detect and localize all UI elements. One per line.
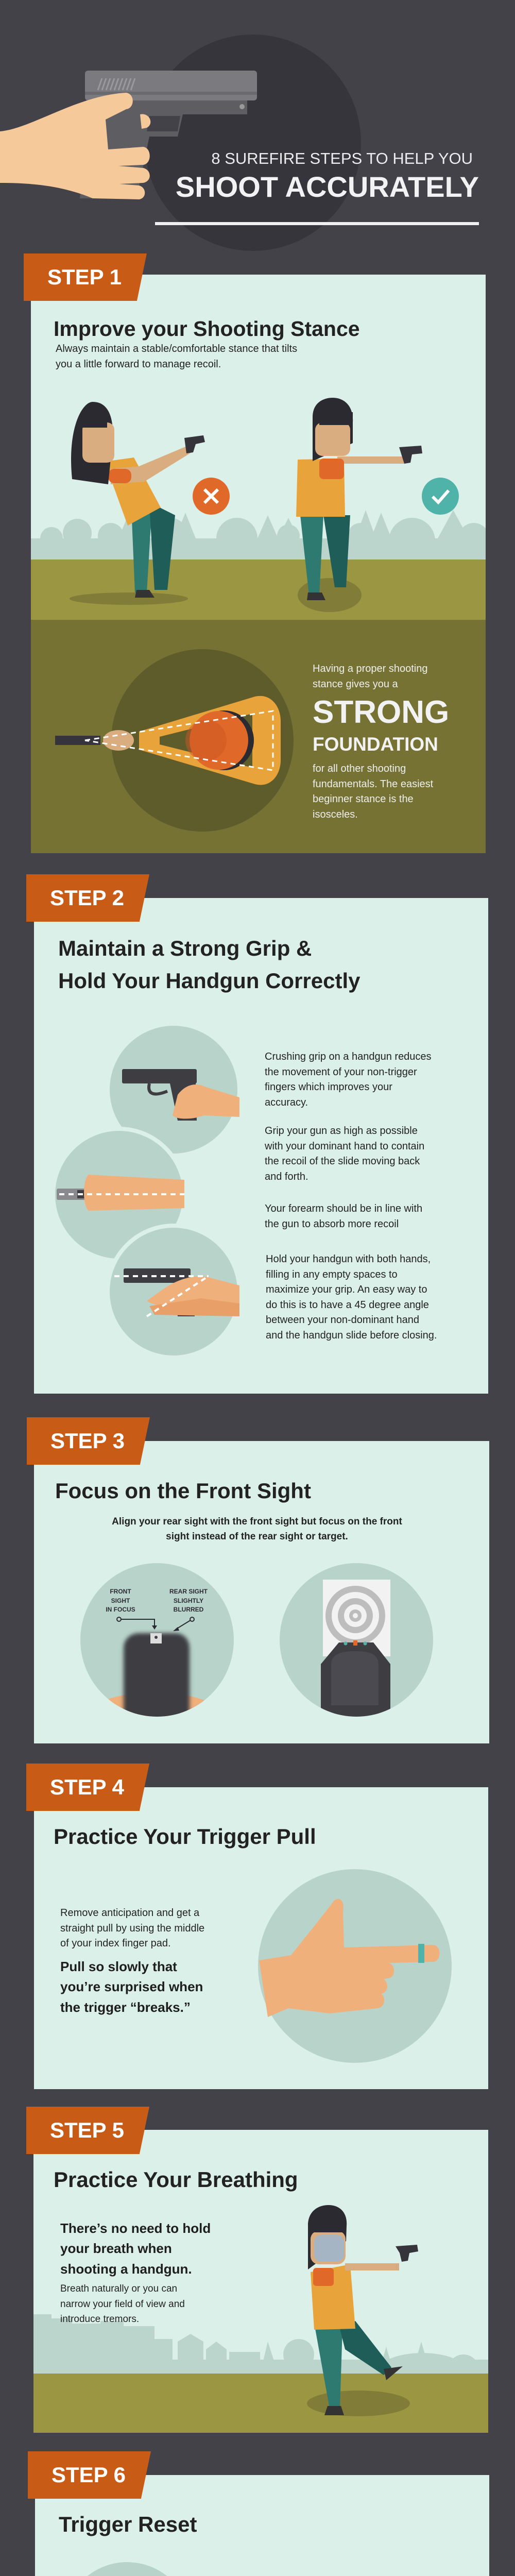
text: grip tips: do this is to have a 45 degree angle [266,1299,429,1311]
subtitle: sight instead of the rear sight or target. [166,1531,348,1542]
text: trigger pull [60,1907,204,1949]
step 5 tab: STEP 5 [50,2118,124,2142]
sight picture: front sight focus: FRONT [110,1588,131,1595]
sight picture: front sight focus: SIGHT [111,1597,130,1604]
heading: Focus on the Front Sight [55,1479,311,1503]
heading: Practice Your Trigger Pull [54,1824,316,1849]
heading: Trigger Reset [59,2512,197,2536]
panel: step 1 [31,275,486,853]
text [60,2283,185,2325]
text: narrow your field of view and [60,2299,185,2309]
subtitle: Align your rear sight with the front sight but focus on the front [112,1516,402,1527]
callout bold [60,2221,211,2277]
subtitle [112,1516,402,1542]
callout: strong foundation: stance gives you a [313,678,398,689]
title: SHOOT ACCURATELY [176,171,479,203]
sight picture: front sight focus: REAR SIGHT [169,1588,208,1595]
step 1 tab: STEP 1 [47,265,122,289]
sight picture: front sight focus: SLIGHTLY [174,1597,203,1604]
step 1 tab [24,253,147,301]
text: grip tips: between your non-dominant hand [266,1314,419,1326]
text: grip tips: the recoil of the slide moving back [265,1156,420,1167]
text: trigger pull: Remove anticipation and get a [60,1907,199,1919]
scene: stance comparison [31,398,489,621]
icon: check [422,478,459,515]
text: grip tips: Grip your gun as high as possible [265,1125,418,1137]
sight picture: front sight focus: BLURRED [174,1606,204,1613]
text: grip tips: and the handgun slide before closing. [266,1329,437,1341]
callout: strong foundation: isosceles. [313,809,358,820]
title [155,149,479,225]
scene: city and breathing shooter [33,2205,488,2433]
text: grip tips: Crushing grip on a handgun reduces [265,1051,432,1062]
sight picture: front sight focus: IN FOCUS [106,1606,135,1613]
heading: Hold Your Handgun Correctly [58,969,360,993]
step 6 tab: STEP 6 [52,2463,126,2487]
callout: strong foundation: Having a proper shooting [313,663,427,674]
step 5 tab [26,2107,149,2154]
icon: wrong X [193,478,230,515]
callout bold: you’re surprised when [60,1979,203,1994]
callout: strong foundation [313,663,449,820]
heading: Maintain a Strong Grip & [58,936,312,960]
callout bold: shooting a handgun. [60,2261,192,2277]
step 4 tab: STEP 4 [50,1775,124,1799]
callout bold [60,1959,203,2015]
text: grip tips: accuracy. [265,1096,308,1108]
text: grip tips: with your dominant hand to contain [265,1141,424,1152]
step 2 tab [26,874,149,922]
panel: step 4 [34,1787,488,2089]
text: grip tips: the gun to absorb more recoil [265,1218,399,1229]
step 6 tab [28,2451,151,2499]
text: intro: Always maintain a stable/comfortable stance that tilts [56,343,297,354]
text: grip tips [265,1051,437,1341]
callout: strong foundation: fundamentals. The easiest [313,778,433,789]
callout bold: Pull so slowly that [60,1959,177,1974]
text: grip tips: maximize your grip. An easy way to [266,1284,427,1295]
trigger reset illustrations [61,2560,245,2576]
heading [58,936,360,993]
heading: Practice Your Breathing [54,2167,298,2192]
callout: strong foundation: STRONG [313,694,449,730]
title: 8 SUREFIRE STEPS TO HELP YOU [211,149,473,167]
sight picture: front sight focus [80,1563,234,1717]
text: grip tips: Your forearm should be in line with [265,1203,422,1214]
text: trigger pull: of your index finger pad. [60,1938,171,1949]
text: intro: you a little forward to manage recoil. [56,359,221,370]
step 4 tab [26,1764,149,1811]
grip illustrations [53,1024,239,1358]
callout bold: your breath when [60,2241,172,2256]
text: trigger pull: straight pull by using the middle [60,1923,204,1934]
text: grip tips: Hold your handgun with both hands, [266,1253,431,1265]
step 3 tab [27,1417,150,1465]
header: hand holding gun [0,35,361,251]
text: intro [56,343,297,370]
text: introduce tremors. [60,2314,139,2325]
panel: step 6 [35,2475,489,2576]
step 2 tab: STEP 2 [50,886,124,910]
panel: step 3 [34,1441,489,1743]
text: grip tips: fingers which improves your [265,1081,392,1093]
callout bold: There’s no need to hold [60,2221,211,2236]
heading: Improve your Shooting Stance [54,317,360,341]
text: Breath naturally or you can [60,2283,177,2294]
panel: step 5 [33,2130,488,2433]
callout bold: the trigger “breaks.” [60,1999,191,2015]
step 3 tab: STEP 3 [50,1429,125,1453]
text: grip tips: and forth. [265,1171,308,1182]
callout: strong foundation: for all other shooting [313,763,406,774]
top-down isosceles stance [31,620,486,853]
callout: strong foundation: FOUNDATION [313,734,438,755]
illustration: trigger finger hand [258,1869,452,2063]
text: grip tips: the movement of your non-trigger [265,1066,417,1078]
callout: strong foundation: beginner stance is the [313,793,414,805]
panel: step 2 [34,898,488,1394]
text: grip tips: filling in any empty spaces to [266,1268,398,1280]
sight picture: target [280,1563,433,1721]
